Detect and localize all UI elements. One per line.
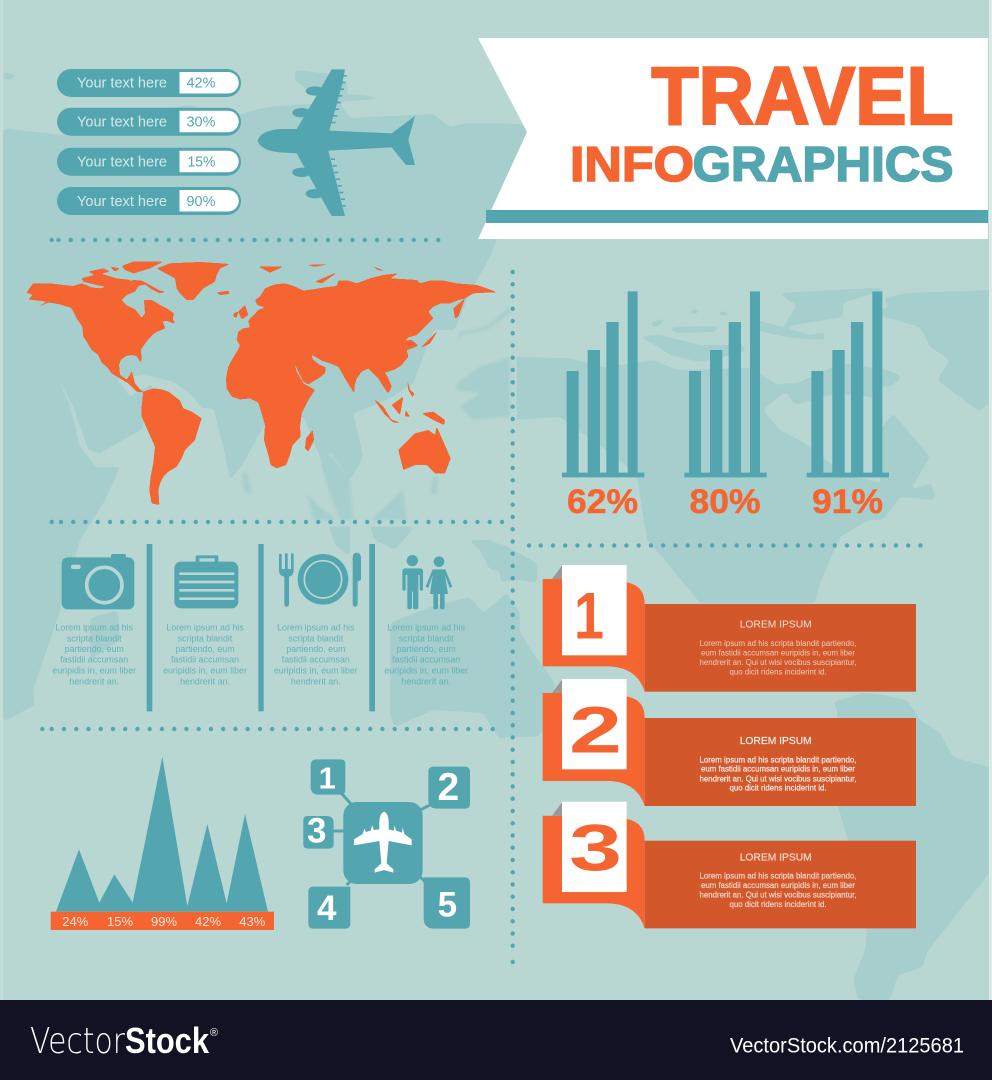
caption suitcase: euripidis in, eum liber — [163, 665, 247, 675]
peak chart: 42% — [195, 914, 221, 929]
pill 15%: Your text here — [77, 154, 167, 170]
north america — [24, 280, 175, 392]
hub diagram — [303, 759, 470, 929]
pill 15%: 15% — [188, 154, 216, 170]
ribbon 3: Lorem ipsum ad his scripta blandit partiendo, — [700, 872, 856, 881]
ribbon 1: LOREM IPSUM — [740, 619, 812, 631]
caption cutlery: Lorem ipsum ad his — [277, 623, 355, 633]
ribbon 2: Lorem ipsum ad his scripta blandit partiendo, — [700, 755, 856, 764]
icon: plate and cutlery — [279, 553, 361, 607]
hub nodes — [303, 759, 470, 929]
dotted dividers — [42, 240, 922, 963]
pill 42%: 42% — [186, 76, 216, 92]
peak chart: 99% — [151, 914, 177, 929]
footer bar — [0, 1000, 992, 1080]
caption camera: fastidii accumsan — [60, 655, 128, 665]
ribbon 1: eum fastidii accumsan euripidis in, eum liber — [701, 648, 855, 657]
caption people: hendrerit an. — [401, 676, 451, 686]
caption camera: scripta blandit — [67, 633, 122, 643]
caption cutlery: hendrerit an. — [291, 676, 341, 686]
ribbon 3: LOREM IPSUM — [740, 851, 812, 863]
hub diagram: 5 — [438, 886, 457, 925]
ribbon 1: hendrerit an. Qui ut wisi vocibus suscipiantur, — [700, 658, 856, 667]
peak chart: 24% — [62, 914, 89, 929]
caption people: Lorem ipsum ad his — [387, 623, 465, 633]
pill 30%: Your text here — [77, 114, 167, 130]
hub diagram: 4 — [317, 889, 337, 928]
stat pills — [57, 69, 241, 215]
ribbon 1: quo dicit ridens inciderint id. — [730, 667, 826, 676]
bar charts — [562, 291, 889, 521]
pill 30% — [57, 108, 241, 136]
caption people: partiendo, eum — [397, 644, 456, 654]
footer logo: Vector — [30, 1021, 125, 1062]
icon captions — [52, 623, 468, 686]
ribbon 2: hendrerit an. Qui ut wisi vocibus suscipiantur, — [700, 774, 856, 783]
caption camera: Lorem ipsum ad his — [55, 623, 133, 633]
caption cutlery: euripidis in, eum liber — [274, 665, 358, 675]
caption camera: euripidis in, eum liber — [52, 665, 136, 675]
peak chart: 15% — [107, 914, 133, 929]
footer image id: VectorStock.com/2125681 — [730, 1035, 964, 1058]
caption suitcase: fastidii accumsan — [171, 655, 239, 665]
south america — [142, 388, 202, 505]
pill 42%: Your text here — [77, 76, 167, 92]
caption cutlery: partiendo, eum — [286, 644, 345, 654]
caption suitcase: hendrerit an. — [180, 676, 230, 686]
caption cutlery: scripta blandit — [288, 633, 344, 643]
ribbon 1: 1 — [574, 578, 604, 652]
ribbon 3: 3 — [569, 811, 622, 885]
peak chart — [51, 757, 274, 930]
eurasia and africa — [226, 273, 497, 468]
title banner — [478, 38, 988, 239]
caption suitcase: partiendo, eum — [175, 644, 235, 654]
heading: graphics: GRAPHICS — [692, 138, 954, 192]
ribbon 2: eum fastidii accumsan euripidis in, eum liber — [701, 765, 855, 774]
icon: suitcase — [174, 555, 238, 608]
ribbon 2: LOREM IPSUM — [740, 735, 812, 747]
pill 90%: 90% — [186, 194, 216, 210]
bar chart 62% — [562, 291, 644, 521]
pill 90%: Your text here — [77, 194, 167, 210]
pill 42% — [57, 69, 241, 97]
bar chart 62%: 62% — [567, 483, 638, 521]
hub diagram: 3 — [307, 812, 326, 851]
orange world map — [24, 262, 497, 505]
pill 15% — [57, 148, 241, 176]
bar chart 91%: 91% — [812, 483, 883, 521]
islands — [217, 264, 465, 452]
pill 30%: 30% — [186, 114, 216, 130]
pill 90% — [57, 187, 241, 215]
travel icons — [62, 544, 452, 711]
hub diagram: 1 — [319, 760, 336, 795]
ribbon 2 — [543, 679, 916, 806]
australia — [398, 427, 451, 473]
heading: info: INFO — [570, 138, 694, 192]
caption camera: partiendo, eum — [65, 644, 124, 654]
footer logo — [30, 1020, 218, 1062]
heading: travel: TRAVEL — [652, 51, 954, 142]
greenland — [157, 262, 230, 300]
hub connectors — [332, 792, 433, 885]
ribbon 2: 2 — [569, 693, 622, 767]
arctic islands — [82, 262, 163, 288]
ribbon 3: eum fastidii accumsan euripidis in, eum liber — [701, 881, 855, 890]
light landmass overlay on background map — [49, 250, 517, 527]
ribbon 1: Lorem ipsum ad his scripta blandit partiendo, — [700, 639, 856, 648]
caption suitcase: Lorem ipsum ad his — [166, 623, 244, 633]
ribbon 3: quo dicit ridens inciderint id. — [730, 900, 826, 909]
caption suitcase: scripta blandit — [178, 633, 233, 643]
hub diagram: 2 — [437, 766, 459, 809]
icon: man and woman — [402, 555, 452, 609]
footer logo: Stock — [125, 1020, 210, 1061]
ribbon 1 — [543, 565, 916, 692]
bar chart 80%: 80% — [690, 483, 760, 521]
caption people: fastidii accumsan — [392, 655, 460, 665]
hub centre — [343, 802, 423, 884]
ribbon 3: hendrerit an. Qui ut wisi vocibus suscipiantur, — [700, 891, 856, 900]
peak chart: 43% — [239, 914, 266, 929]
icon: airplane — [258, 69, 415, 216]
caption people: euripidis in, eum liber — [384, 665, 468, 675]
bar chart 91% — [807, 291, 889, 521]
caption camera: hendrerit an. — [69, 676, 119, 686]
icon: white plane — [354, 812, 412, 873]
bar chart 80% — [684, 291, 767, 521]
ribbon 2: quo dicit ridens inciderint id. — [730, 784, 826, 793]
icon: camera — [62, 554, 134, 609]
caption people: scripta blandit — [399, 633, 454, 643]
column dividers — [147, 544, 375, 711]
ribbon 3 — [543, 802, 916, 928]
caption cutlery: fastidii accumsan — [282, 655, 350, 665]
footer logo: ® — [210, 1027, 218, 1039]
